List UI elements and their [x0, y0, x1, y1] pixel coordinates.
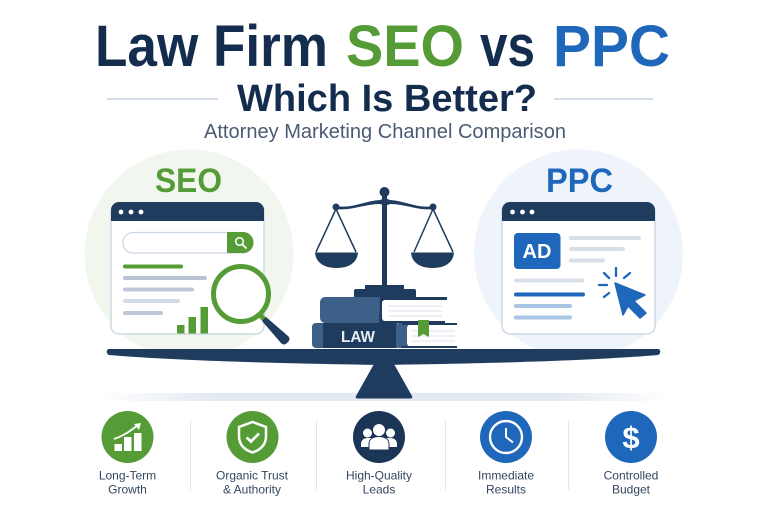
label: & Authority	[223, 482, 281, 496]
feature: organic trust	[216, 411, 289, 496]
feature: leads	[346, 411, 412, 496]
panel: SEO	[84, 150, 294, 358]
seesaw beam	[107, 349, 660, 365]
feature: long-term growth	[99, 411, 156, 496]
books	[312, 297, 457, 348]
bar chart	[177, 307, 208, 334]
browser window	[111, 202, 264, 334]
icon: people	[353, 411, 405, 463]
feature: controlled budget	[604, 411, 658, 496]
seesaw fulcrum	[356, 364, 412, 398]
label: Immediate	[478, 468, 534, 482]
PPC heading: PPC	[546, 162, 613, 200]
feature: immediate results	[478, 411, 534, 496]
subtitle heading: Which Is Better?	[237, 78, 537, 120]
title: PPC	[553, 14, 670, 79]
divider left	[107, 98, 218, 100]
ground shadow	[100, 393, 670, 401]
PPC background circle	[474, 150, 683, 358]
icon: click cursor	[599, 268, 646, 318]
title: SEO	[346, 14, 464, 79]
search bar	[123, 232, 254, 253]
icon: scales of justice	[315, 187, 454, 298]
icon: clock	[480, 411, 532, 463]
label: High-Quality	[346, 468, 412, 482]
icon: magnifying glass	[214, 266, 290, 344]
label: Controlled	[604, 468, 658, 482]
browser window	[502, 202, 655, 334]
icon: shield	[226, 411, 278, 463]
tagline: Attorney Marketing Channel Comparison	[204, 121, 566, 143]
icon row dividers	[190, 420, 569, 490]
upper book	[320, 297, 447, 323]
icon: dollar: $	[622, 420, 640, 455]
bookmark	[418, 320, 429, 337]
panel: PPC	[474, 150, 683, 358]
SEO background circle	[84, 150, 294, 358]
label: Results	[486, 482, 526, 496]
label: Growth	[108, 482, 147, 496]
SEO heading: SEO	[155, 162, 222, 200]
lower book	[312, 320, 457, 348]
result lines	[125, 266, 205, 313]
title: Law Firm	[95, 14, 328, 79]
icon: growth chart	[102, 411, 154, 463]
LAW label: LAW	[341, 329, 376, 346]
divider right	[554, 98, 653, 100]
label: Organic Trust	[216, 468, 289, 482]
title: vs	[480, 14, 535, 79]
AD badge: AD	[523, 241, 551, 263]
ad text lines	[516, 238, 639, 318]
label: Budget	[612, 482, 651, 496]
title	[95, 14, 670, 79]
AD badge	[514, 233, 560, 269]
label: Leads	[363, 482, 395, 496]
label: Long-Term	[99, 468, 156, 482]
